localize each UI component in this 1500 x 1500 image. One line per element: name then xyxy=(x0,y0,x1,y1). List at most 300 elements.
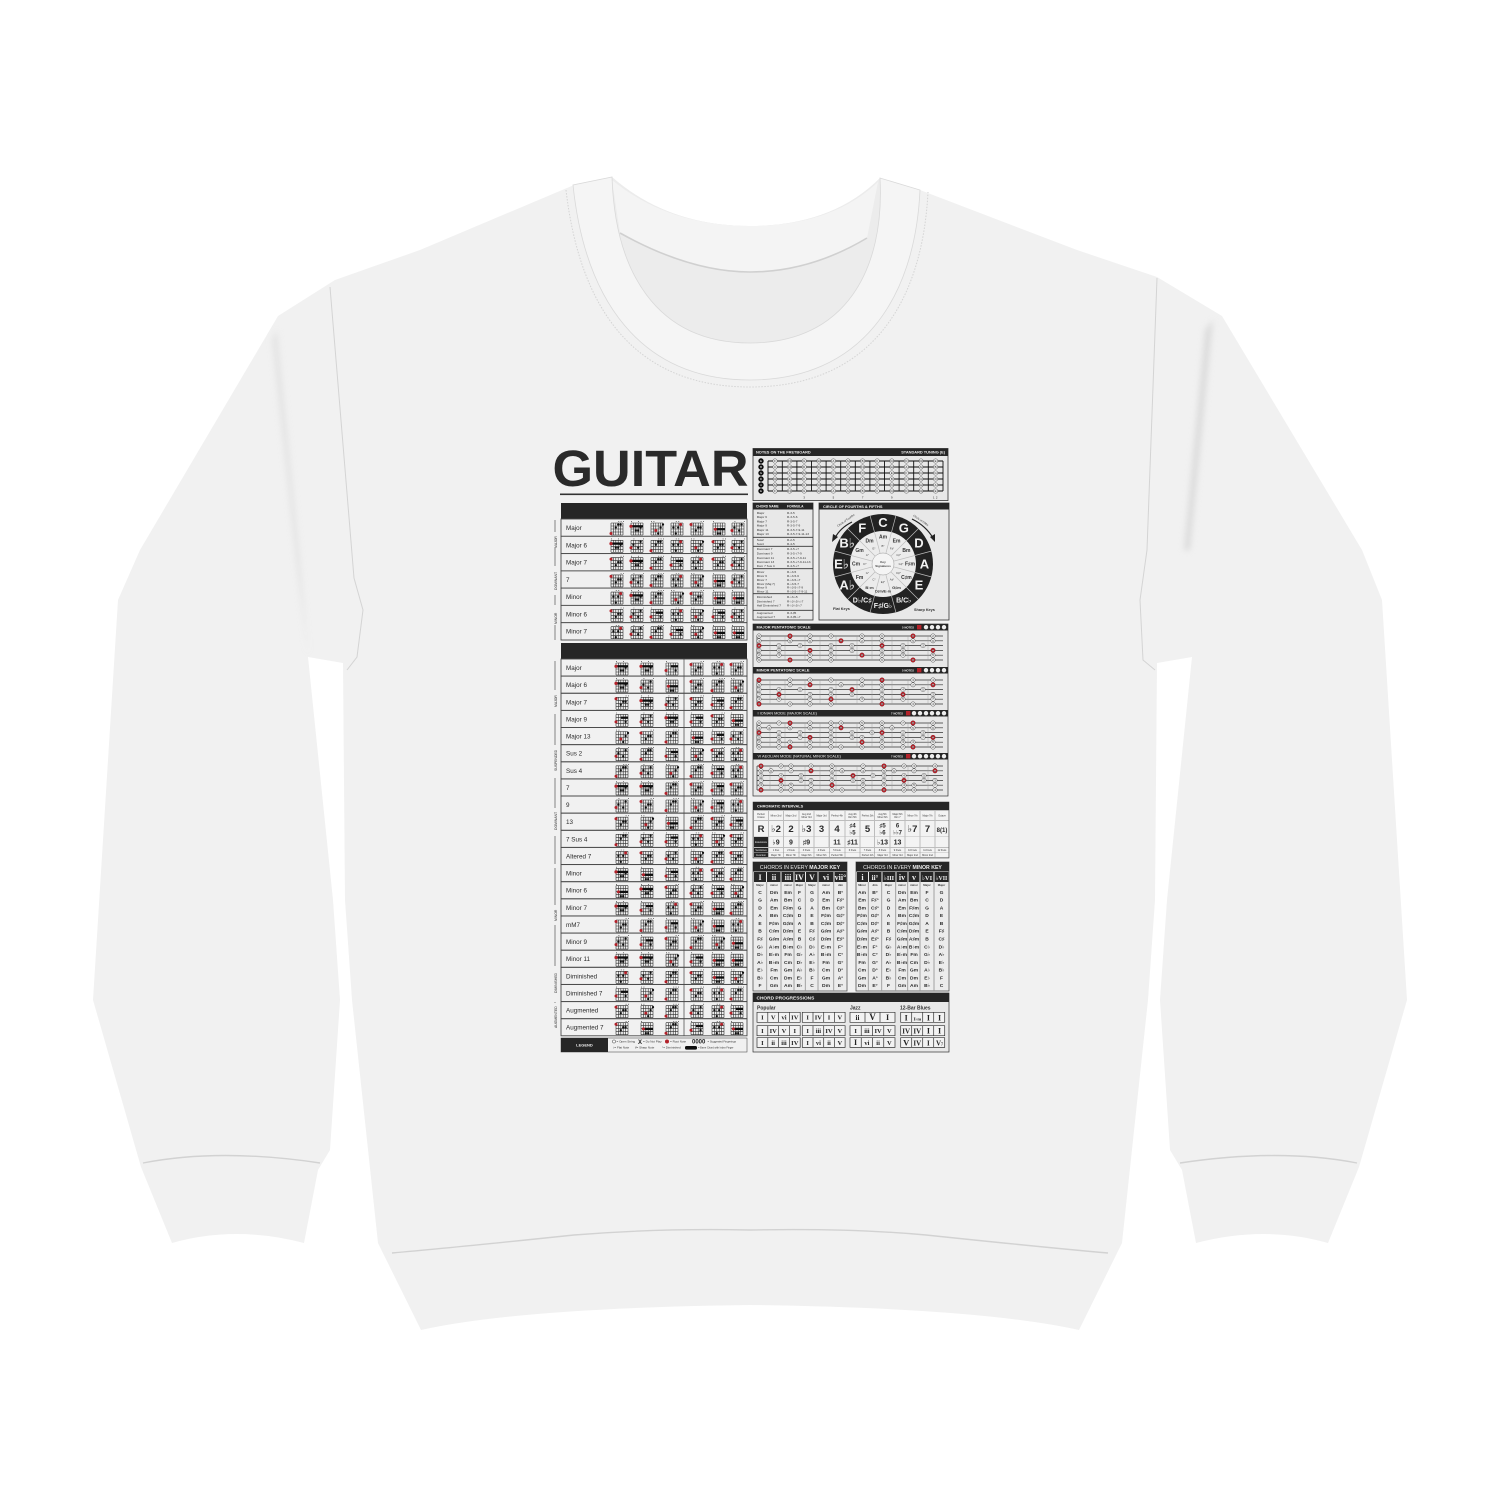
outer ring major keys: B♭ xyxy=(839,536,855,551)
fret distance rows: 11 Frets xyxy=(923,849,933,852)
minor key chord grid: Fm xyxy=(898,968,906,974)
blues progressions: IV xyxy=(902,1028,910,1036)
formula: dominant group: Dominant 13 xyxy=(757,560,775,564)
formula: dominant group: Dom 7 Sus 4 xyxy=(757,564,775,568)
major key numerals: ii xyxy=(772,873,777,882)
interval name cells: Aug 2nd xyxy=(802,813,812,816)
popular progressions: I xyxy=(761,1014,764,1022)
minor key chord grid: D♭ xyxy=(886,952,891,958)
major key chord grid: D♯° xyxy=(837,921,845,927)
arrow: fifths: Circle of Fifths xyxy=(912,514,930,527)
scale diagram: aeolian mode: 567R234567R xyxy=(760,769,936,773)
outer ring major keys: A xyxy=(920,556,930,572)
jazz progressions: iii xyxy=(864,1028,870,1035)
panel: chromatic intervals xyxy=(753,802,949,858)
major key chord grid: E♭m xyxy=(769,952,780,958)
minor key numerals: ♭III xyxy=(884,875,895,882)
middle ring minor keys: F♯m xyxy=(905,562,916,568)
row: 7: 7 xyxy=(566,785,570,792)
major key chord grid: Em xyxy=(770,905,778,911)
extensions row: 9 xyxy=(789,840,793,846)
fret distance rows: 8 Frets xyxy=(879,849,887,852)
major key chord grid: F° xyxy=(838,944,843,950)
interval name cells: Perfect xyxy=(757,813,765,816)
fret distance rows: 2 Frets xyxy=(787,849,796,852)
major key chord grid: Dm xyxy=(822,983,831,989)
popular progressions: ii xyxy=(827,1040,831,1047)
jazz progressions: V xyxy=(887,1028,892,1035)
minor key chord grid: E♭m xyxy=(857,944,868,950)
middle ring minor keys: Em xyxy=(893,538,901,544)
interval name cells: Unison xyxy=(757,816,765,819)
row: Augmented: Augmented xyxy=(566,1008,599,1015)
inner ring diminished chords: G° xyxy=(866,571,869,575)
open string labels xyxy=(760,459,762,493)
progressions subheads: Popular xyxy=(757,1006,776,1012)
minor key numerals: iv xyxy=(899,873,905,882)
side category labels: MINOR xyxy=(554,909,558,921)
formula: minor group: R-♭3-5-♭7-9-11 xyxy=(787,590,808,594)
formula: suspended group xyxy=(757,538,795,546)
middle ring minor keys: Gm xyxy=(855,548,864,554)
fret distance rows: 1 Fret xyxy=(773,849,779,852)
row: Diminished 7 xyxy=(561,984,747,1002)
inner ring diminished chords: F♯° xyxy=(890,546,894,550)
major key chord grid: D♭ xyxy=(809,944,815,950)
popular progressions: ii xyxy=(771,1040,775,1047)
major key chord grid: G♭ xyxy=(757,944,763,950)
scale diagram: ionian mode: R23456R23 xyxy=(758,731,924,735)
legend xyxy=(561,1038,747,1052)
title: GUITAR xyxy=(552,440,748,497)
major key chord grid: minor xyxy=(822,883,831,887)
fret distance rows: 4 Frets xyxy=(818,849,826,852)
scale diagram: major pentatonic: 6R236R2 xyxy=(758,658,934,662)
formula: diminished group: R-♭3-♭5 xyxy=(787,595,798,599)
major key column lines xyxy=(767,882,834,991)
minor key chord grid: E♭ xyxy=(939,960,944,966)
formula: suspended group: Sus4 xyxy=(757,542,764,546)
panel: chords in every major key xyxy=(753,862,847,991)
extensions row: 13 xyxy=(894,840,901,846)
scale diagram: ionian mode: 34567R23456 xyxy=(758,726,934,730)
popular progressions: I xyxy=(806,1014,809,1022)
minor key chord grid: B° xyxy=(872,890,878,896)
major key chord grid: A♭ xyxy=(797,968,802,974)
major key chord grid: D♭ xyxy=(797,960,802,966)
minor key chord grid: D♭ xyxy=(939,944,944,950)
minor key chord grid: Fm xyxy=(910,952,918,958)
row: Augmented 7 xyxy=(561,1019,747,1036)
fretboard note names: CC♯DD♯EFF♯GG♯AA♯B xyxy=(774,465,937,469)
formula header: CHORD NAME xyxy=(756,505,780,509)
minor key chord grid: D° xyxy=(872,968,878,974)
major key chord grid: Major xyxy=(796,883,804,887)
row: Major 7: Major 7 xyxy=(566,699,587,706)
popular progressions: V xyxy=(771,1014,776,1022)
major key chord grid: D♯m xyxy=(821,936,832,942)
fret distance rows: Minor 3rd xyxy=(892,854,903,857)
popular progressions: IV xyxy=(770,1028,777,1035)
row: Diminished xyxy=(561,967,747,984)
collar rib band xyxy=(573,177,920,380)
major key chord grid: F♯m xyxy=(821,913,832,919)
minor key chord grid: A♭ xyxy=(886,960,891,966)
minor key chord grid: F♯m xyxy=(909,905,920,911)
row: Major xyxy=(561,659,747,676)
formula header: FORMULA xyxy=(787,505,804,509)
row: Major 6 xyxy=(561,536,747,554)
major key chord grid: G xyxy=(810,890,814,896)
fretboard note names: D♯EFF♯GG♯AA♯BCC♯D xyxy=(773,477,937,481)
minor key chord grid: Gm xyxy=(898,983,907,989)
panel: second chord table xyxy=(554,643,747,1036)
formula: minor group: R-♭3-5-♭7 xyxy=(787,578,801,582)
row: Diminished 7: Diminished 7 xyxy=(566,990,603,998)
row: Major 13: Major 13 xyxy=(566,734,591,740)
major key chord grid: E♭ xyxy=(757,968,763,974)
formula: diminished group: R-♭3-♭5-♭7 xyxy=(787,604,802,608)
popular progressions: I xyxy=(806,1040,809,1047)
row: Minor 7: Minor 7 xyxy=(566,905,587,912)
formula: augmented group: Augmented xyxy=(757,611,773,615)
major key chord grid: C♭ xyxy=(797,944,802,950)
scale header: major pentatonic: 5 NOTES xyxy=(902,626,914,630)
row: Augmented xyxy=(561,1002,747,1019)
interval name cells: Perfect 4th xyxy=(831,814,843,818)
jazz progressions: I xyxy=(854,1038,857,1047)
major key header: CHORDS IN EVERY MAJOR KEY xyxy=(760,865,841,871)
minor key chord grid: A♯° xyxy=(871,929,879,935)
minor key chord grid: F xyxy=(940,975,943,981)
formula: minor group xyxy=(757,570,808,594)
formula group dividers xyxy=(753,537,813,610)
minor key chord grid: B xyxy=(940,921,944,927)
row: Sus 2 xyxy=(561,745,747,762)
formula: major group: Major 7 xyxy=(757,519,767,523)
minor key chord grid: A xyxy=(887,913,891,919)
minor key chord grid: D xyxy=(887,905,891,911)
major key chord grid: G♭ xyxy=(796,952,803,958)
minor key chord grid: F♯m xyxy=(897,921,908,927)
major key chord grid: C♯ xyxy=(809,936,816,942)
row: Minor 11: Minor 11 xyxy=(566,956,591,963)
interval name cells: Aug 5th xyxy=(878,813,887,816)
fret distance rows: 3 Frets xyxy=(803,849,811,852)
formula: minor group: Minor 9 xyxy=(757,586,767,590)
fret distance rows: 9 Frets xyxy=(894,849,902,852)
minor key chord grid: Major xyxy=(885,883,893,887)
scale header: aeolian mode: 7 NOTES xyxy=(891,755,903,759)
popular progressions: I xyxy=(828,1014,831,1022)
sharp keys label: Sharp Keys xyxy=(914,608,935,612)
formula: dominant group: Dominant 7 xyxy=(757,547,773,551)
minor key chord grid: Dm xyxy=(898,890,907,896)
scale diagram: aeolian mode xyxy=(757,764,943,792)
major key chord grid: G xyxy=(798,905,802,911)
extensions row: ♭9 xyxy=(772,838,780,846)
minor key chord grid: E♯° xyxy=(871,936,879,942)
major key chord grid: C° xyxy=(838,952,843,958)
row: Minor 11 xyxy=(561,950,747,967)
minor key chord grid: F♯° xyxy=(871,898,879,904)
minor key chord grid: Major xyxy=(923,883,932,887)
fret distance rows: Inversion xyxy=(756,854,767,857)
middle ring minor keys: Dm xyxy=(865,538,874,544)
inner ring diminished chords: E° xyxy=(873,546,875,550)
major key chord grid: F♯m xyxy=(769,921,780,927)
legend: = Barre Chord with Index Finger xyxy=(698,1046,734,1050)
row: 7: 7 xyxy=(566,577,570,584)
fret distance rows: Major 7th xyxy=(771,854,782,857)
major key chord grid: minor xyxy=(784,883,793,887)
formula: dominant group: Dominant 9 xyxy=(757,552,773,556)
minor key chord grid: Em xyxy=(910,890,918,896)
popular progressions: I xyxy=(761,1028,764,1035)
minor key chord grid: C♯° xyxy=(871,905,879,911)
interval symbol cells: 8(1) xyxy=(937,828,947,834)
fretboard grid xyxy=(768,461,943,491)
formula: minor group: R-♭3-5-7 xyxy=(787,582,799,586)
outer ring major keys: A♭ xyxy=(839,577,855,592)
major key chord grid: Gm xyxy=(784,968,793,974)
row: Minor 9: Minor 9 xyxy=(566,939,587,946)
scale header: ionian mode: I IONIAN MODE (MAJOR SCALE) xyxy=(758,711,818,716)
side category labels: SUSPENDED xyxy=(554,749,558,771)
interval name cells: Octave xyxy=(938,814,946,818)
formula: major group: Major 9 xyxy=(757,524,767,528)
interval symbol cells: ♭6 xyxy=(879,830,886,836)
fret numbers: 357912 xyxy=(803,496,938,500)
major key chord grid: E° xyxy=(838,983,843,989)
minor key chord grid: Em xyxy=(858,898,866,904)
row: Altered 7: Altered 7 xyxy=(566,853,592,860)
inner ring diminished chords: A° xyxy=(866,553,869,557)
legend: = Root Note xyxy=(670,1040,686,1044)
guitar chart print xyxy=(552,440,949,1052)
major key chord grid: Bm xyxy=(770,913,779,919)
major key chord grid: E♭m xyxy=(821,944,832,950)
minor key chord grid: D♭ xyxy=(924,960,930,966)
minor key chord grid: Bm xyxy=(910,898,919,904)
open string labels: A xyxy=(760,483,762,487)
flat keys label: Flat Keys xyxy=(833,607,850,611)
formula: major group: R-3-5 xyxy=(787,511,795,515)
minor key chord grid: Fm xyxy=(858,960,866,966)
minor key chord grid: C♯ xyxy=(939,936,945,942)
fret distance rows: 6 Frets xyxy=(849,849,857,852)
popular progressions: I xyxy=(794,1028,797,1035)
interval symbol cells: ♯4 xyxy=(849,822,856,830)
middle ring minor keys: B♭m xyxy=(865,585,874,590)
row: Major 9: Major 9 xyxy=(566,716,587,723)
formula: suspended group: Sus2 xyxy=(757,538,764,542)
interval name cells: Aug 4th xyxy=(848,813,857,816)
popular progressions: I xyxy=(761,1040,764,1047)
major key chord grid: B xyxy=(758,929,762,935)
minor key chord grid: E xyxy=(940,913,944,919)
column divider xyxy=(683,659,685,1036)
row: 7 xyxy=(561,571,747,588)
minor key chord grid: Em xyxy=(898,905,906,911)
blues progressions xyxy=(901,1012,945,1047)
middle ring minor keys: Cm xyxy=(852,562,861,568)
blues progressions: I xyxy=(927,1013,930,1022)
major key chord grid: D xyxy=(758,905,762,911)
row: Major 13 xyxy=(561,728,747,745)
scale diagram: major pentatonic: 6R2356R2 xyxy=(758,634,934,638)
sweatshirt body and sleeves xyxy=(93,177,1407,1330)
interval symbol cells: ♭♭7 xyxy=(893,830,903,836)
legend: LEGEND xyxy=(576,1042,593,1048)
side category labels: MAJOR xyxy=(554,695,558,707)
interval symbol cells xyxy=(754,821,948,836)
row: 7 Sus 4: 7 Sus 4 xyxy=(566,836,588,843)
center label: Key xyxy=(880,560,886,564)
scale header: minor pentatonic xyxy=(753,667,948,674)
popular progressions: V xyxy=(837,1014,842,1022)
major key chord grid: E xyxy=(798,929,802,935)
major key chord grid: Dm xyxy=(770,890,779,896)
popular progressions: iii xyxy=(816,1028,821,1035)
minor key chord grid: E♭ xyxy=(886,968,891,974)
center label xyxy=(875,560,891,568)
row: Altered 7 xyxy=(561,847,747,864)
side category labels: AUGMENTED xyxy=(554,1006,558,1028)
row: Minor 7 xyxy=(561,623,747,640)
interval name cells xyxy=(754,811,948,820)
formula: dominant group: R-3-5-♭7-9-11 xyxy=(787,556,806,560)
outer ring major keys: F xyxy=(858,521,866,536)
open string labels: E xyxy=(760,489,762,493)
fretboard note names: FF♯GG♯AA♯BCC♯DD♯E xyxy=(774,489,937,493)
minor key chord grid: Dm xyxy=(910,975,919,981)
minor key chord grid: F° xyxy=(873,944,878,950)
interval name cells: Major 7th xyxy=(923,814,933,818)
major key chord grid: C xyxy=(798,898,802,904)
formula: minor group: Minor xyxy=(757,570,764,574)
extensions row: ♯9 xyxy=(803,840,810,846)
scale diagram: minor pentatonic: 3457R345 xyxy=(758,688,924,692)
row: Sus 4: Sus 4 xyxy=(566,768,583,775)
interval name cells: Minor 6th xyxy=(878,816,888,819)
inner ring diminished chords: D° xyxy=(863,562,867,566)
formula: dominant group: R-3-5-♭7-9-11-13 xyxy=(787,560,811,564)
major key chord grid: G♯m xyxy=(769,936,780,942)
scale diagram: aeolian mode: 7R234567R23 xyxy=(760,778,936,782)
jazz progressions: V xyxy=(869,1012,876,1022)
formula: augmented group: R-3-♯5 xyxy=(787,611,797,615)
side category labels: MINOR xyxy=(554,612,558,624)
major key numerals: iii xyxy=(785,873,792,882)
minor key chord grid: D♯m xyxy=(857,936,868,942)
blues progressions: I xyxy=(927,1039,930,1047)
formula: minor group: R-♭3-5-6 xyxy=(787,574,799,578)
formula: dominant group: R-4-5-♭7 xyxy=(787,564,799,568)
popular progressions: iii xyxy=(781,1040,787,1047)
interval symbol cells: 6 xyxy=(896,824,900,830)
major key chord grid: Fm xyxy=(822,960,830,966)
minor key chord grid xyxy=(857,883,946,989)
minor key chord grid: B xyxy=(887,929,891,935)
row: Minor 7: Minor 7 xyxy=(566,629,587,636)
formula: dominant group: R-3-5-♭7 xyxy=(787,547,799,551)
minor key chord grid: Gm xyxy=(858,975,867,981)
outer ring major keys: F♯/G♭ xyxy=(874,602,892,610)
major key chord grid: D xyxy=(798,913,802,919)
interval symbol cells: ♭7 xyxy=(908,824,917,835)
progressions header xyxy=(753,993,949,1002)
major key chord grid: E xyxy=(758,921,762,927)
row: Minor: Minor xyxy=(566,594,582,601)
major key numerals: IV xyxy=(795,873,804,882)
scale diagram: major pentatonic xyxy=(757,634,943,662)
major key numerals: vi xyxy=(823,873,830,882)
popular progressions: IV xyxy=(791,1014,799,1022)
scale diagram: aeolian mode: 3457R2345 xyxy=(760,774,925,778)
fret distance rows: Minor 2nd xyxy=(922,854,933,857)
scale header: aeolian mode: VI AEOLIAN MODE (NATURAL MINOR SCALE) xyxy=(758,754,842,759)
middle ring minor keys: Fm xyxy=(856,575,864,581)
formula: minor group: Minor 7 xyxy=(757,578,767,582)
scale diagram: major pentatonic: 2356R235 xyxy=(758,653,934,657)
legend: = Suggested Fingerings xyxy=(708,1040,737,1044)
minor key chord grid: B xyxy=(925,936,929,942)
major key chord grid: B♭m xyxy=(769,960,780,966)
formula: dominant group: R-3-5-♭7-9 xyxy=(787,552,802,556)
interval name cells: Perfect 5th xyxy=(862,814,874,818)
title rule xyxy=(560,494,748,495)
inner ring diminished chords: C° xyxy=(872,578,876,582)
major key chord grid: F♯° xyxy=(837,898,844,904)
fret distance rows: 12 Frets xyxy=(938,849,947,852)
row: 9 xyxy=(561,796,747,813)
fret distance rows: Minor 7th xyxy=(786,854,797,857)
middle ring minor keys: G♯m xyxy=(892,585,901,590)
row: Augmented 7: Augmented 7 xyxy=(566,1025,604,1032)
row: Major 7 xyxy=(561,554,747,571)
inner ring diminished chords: C♯° xyxy=(896,553,901,557)
scale header: minor pentatonic: 5 NOTES xyxy=(902,669,914,673)
fretboard header: STANDARD TUNING (E) xyxy=(901,450,946,455)
minor key column lines xyxy=(868,882,934,991)
formula: major group: R-3-5-6 xyxy=(787,515,798,519)
major key chord grid xyxy=(756,883,845,989)
major key chord grid: Bm xyxy=(784,898,793,904)
minor key chord grid: A♯m xyxy=(909,936,920,942)
scale diagram: major pentatonic: 356R2356 xyxy=(758,639,934,643)
outer ring major keys: G xyxy=(899,521,909,536)
circle wheel xyxy=(833,514,933,614)
major key chord grid: G♯m xyxy=(783,921,794,927)
minor key chord grid: F♯ xyxy=(886,936,892,942)
formula: suspended group: R-4-5 xyxy=(787,542,795,546)
minor key chord grid: B♭m xyxy=(897,960,908,966)
scale header: ionian mode: 7 NOTES xyxy=(891,712,903,716)
minor key chord grid: C♯m xyxy=(909,913,920,919)
minor key chord grid: A♭ xyxy=(924,968,930,974)
minor key chord grid: D♯m xyxy=(909,929,920,935)
scale header: major pentatonic xyxy=(753,624,948,630)
major key chord grid: Fm xyxy=(784,952,792,958)
blues progressions: V xyxy=(903,1037,910,1047)
popular progressions: V xyxy=(837,1040,842,1047)
major key chord grid: A♯° xyxy=(837,929,845,935)
formula: dominant group: Dominant 11 xyxy=(757,556,774,560)
back collar band xyxy=(612,180,878,272)
major key chord grid: A xyxy=(758,913,762,919)
major key chord grid: Dm xyxy=(784,975,793,981)
